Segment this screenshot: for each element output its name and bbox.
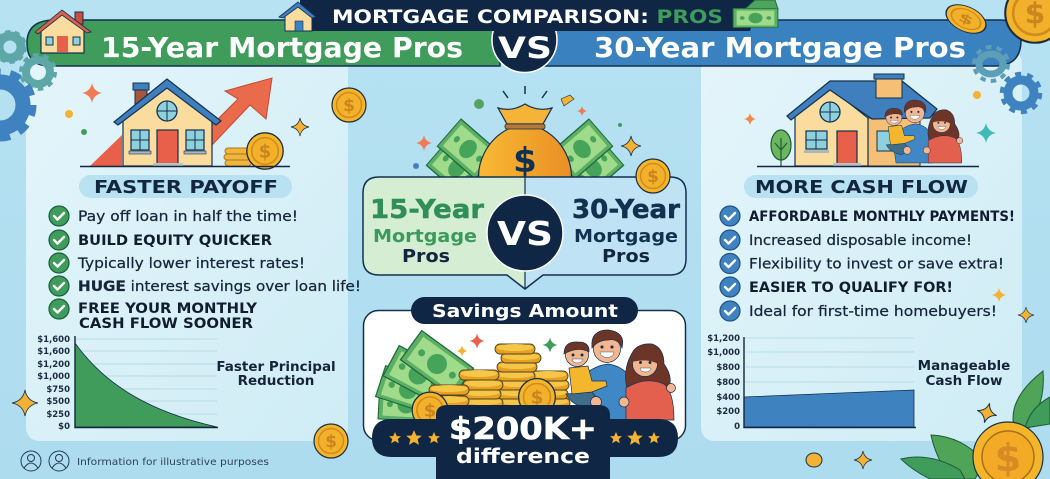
chart: manageable cash flow: $200 [716, 407, 740, 417]
coin on callout [636, 159, 670, 193]
text: 30-year [572, 195, 680, 267]
text: 30-year: Pros [602, 246, 650, 267]
chart: manageable cash flow: $400 [716, 393, 740, 403]
icon: money bag with cash: $ [513, 141, 537, 181]
heading: savings amount [411, 297, 638, 324]
panel: comparison callout [363, 177, 686, 289]
checklist: 15-year benefits: Typically lower interest rates! [77, 256, 305, 272]
footer note [21, 451, 269, 471]
chart: faster principal reduction [37, 335, 218, 432]
heading: faster payoff: FASTER PAYOFF [94, 177, 278, 198]
chart: faster principal reduction: $500 [46, 397, 70, 407]
heading: more cash flow: MORE CASH FLOW [755, 177, 968, 198]
chart: manageable cash flow: $800 [716, 363, 740, 373]
chart: faster principal reduction: $250 [46, 410, 70, 420]
banner: 15-year mortgage pros [27, 20, 500, 66]
heading: faster payoff [79, 175, 292, 198]
icon: money bag with cash [413, 86, 641, 198]
illustration: leaves and big coin: $ [995, 436, 1021, 479]
icon: floating coins [314, 88, 366, 458]
chart: faster principal reduction: $1,000 [37, 372, 70, 382]
chart: manageable cash flow [707, 334, 916, 432]
checklist: 30-year benefits: EASIER TO QUALIFY FOR! [749, 280, 953, 296]
text: 15-year: Pros [402, 246, 450, 267]
callout: $200K+ difference: difference [456, 444, 590, 468]
text: 15-year: Mortgage [373, 226, 477, 247]
chart: faster principal reduction: $1,600 [37, 335, 70, 345]
banner: 30-year mortgage pros: 30-Year Mortgage Pros [594, 31, 966, 64]
checklist: 30-year benefits: Ideal for first-time homebuyers! [749, 304, 997, 320]
chart: faster principal reduction: $0 [58, 422, 70, 432]
checklist: 15-year benefits: BUILD EQUITY QUICKER [78, 233, 272, 249]
illustration: family [564, 330, 676, 420]
chart: faster principal reduction: $1,600 [37, 347, 70, 357]
icon: gears right [974, 47, 1040, 112]
sparkles in savings card [456, 334, 558, 356]
chart: faster principal reduction: $1,200 [37, 360, 70, 370]
chart label: faster principal reduction: Faster Principal [216, 359, 336, 375]
checklist: 30-year benefits [720, 206, 1015, 321]
illustration: coin stacks [412, 344, 570, 428]
callout: $200K+ difference: $200K+ [449, 412, 597, 447]
icon: banner house [35, 10, 91, 53]
text: 30-year: Mortgage [574, 226, 678, 247]
icon: gears left [0, 32, 55, 138]
text: 30-year: 30-Year [572, 195, 680, 225]
title bar [300, 0, 760, 31]
VS circle: VS [497, 214, 553, 253]
footer note: Information for illustrative purposes [77, 457, 269, 468]
chart: manageable cash flow: $800 [716, 378, 740, 388]
checklist: 15-year benefits: Pay off loan in half the time! [78, 209, 298, 225]
panel: 15-year pros [26, 50, 361, 441]
checklist: 30-year benefits: Increased disposable income! [749, 233, 972, 249]
VS circle [487, 195, 563, 271]
text: 15-year: 15-Year [370, 195, 484, 225]
checklist: 30-year benefits: Flexibility to invest or save extra! [749, 256, 1004, 272]
chart: manageable cash flow: 0 [734, 422, 740, 432]
text: 15-year [370, 195, 484, 267]
illustration: house with rising arrow [80, 78, 290, 169]
icon: top coins [942, 0, 1050, 43]
chart: faster principal reduction: $750 [46, 385, 70, 395]
chart label: manageable cash flow: Manageable [918, 358, 1010, 374]
checklist: 15-year benefits: HUGE interest savings over loan life! [78, 279, 361, 295]
icon: title cash [733, 0, 778, 28]
decorative sparkles and dots [12, 83, 1034, 469]
checklist: 15-year benefits: FREE YOUR MONTHLY [78, 301, 258, 317]
chart label: faster principal reduction: Reduction [238, 373, 314, 389]
banner: 15-year mortgage pros: 15-Year Mortgage Pros [101, 31, 463, 64]
VS badge [492, 8, 557, 72]
checklist: 15-year benefits: CASH FLOW SOONER [79, 316, 253, 332]
checklist: 15-year benefits [49, 206, 361, 332]
illustration: house with family [757, 74, 979, 166]
illustration: leaves and big coin [901, 371, 1050, 479]
panel: savings amount [364, 310, 686, 440]
illustration: cash fan [376, 331, 473, 422]
chart: manageable cash flow: $1,000 [707, 348, 740, 358]
banner: 30-year mortgage pros [540, 20, 1021, 66]
heading: savings amount: Savings Amount [432, 301, 618, 322]
panel: 30-year pros [701, 50, 1022, 441]
title bar: MORTGAGE COMPARISON: PROS [332, 6, 723, 28]
chart label: manageable cash flow: Cash Flow [926, 373, 1002, 389]
callout: $200K+ difference [372, 405, 678, 479]
icon: title house [279, 2, 316, 31]
VS badge: VS [498, 31, 552, 65]
chart: manageable cash flow: $1,200 [707, 334, 740, 344]
checklist: 30-year benefits: AFFORDABLE MONTHLY PAYMENTS! [749, 209, 1015, 225]
